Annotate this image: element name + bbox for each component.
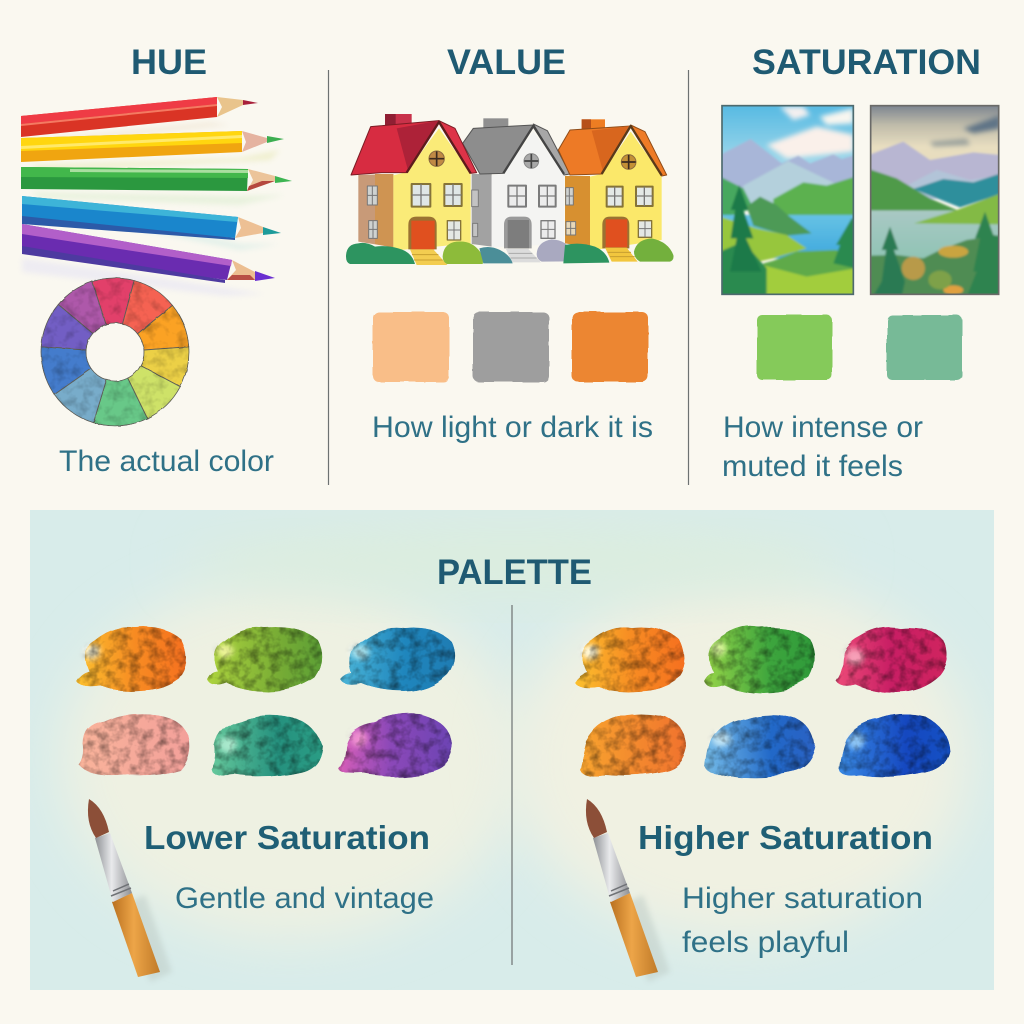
landscape: vivid xyxy=(720,104,855,297)
caption: value: How light or dark it is xyxy=(372,411,653,444)
swatch: muted green xyxy=(887,315,962,380)
caption: hue: The actual color xyxy=(59,445,274,478)
description: higher saturation: Higher saturation xyxy=(682,882,923,915)
orange house xyxy=(558,119,667,262)
color swatches: value xyxy=(373,312,648,382)
heading: value: VALUE xyxy=(447,43,566,82)
illustration: two landscapes xyxy=(720,104,1001,297)
swatch: grey xyxy=(473,312,549,382)
panel: value xyxy=(346,43,674,444)
panel background wash xyxy=(30,510,994,990)
swatch: vivid green xyxy=(757,315,832,380)
red house xyxy=(351,114,477,265)
label: lower saturation: Lower Saturation xyxy=(144,819,430,856)
icon: paintbrush xyxy=(586,799,670,982)
swatch: orange xyxy=(572,312,648,382)
description: lower saturation: Gentle and vintage xyxy=(175,882,434,915)
description: higher saturation: feels playful xyxy=(682,926,849,959)
paint blobs: lower saturation xyxy=(75,627,455,777)
heading: palette: PALETTE xyxy=(437,553,592,592)
sub-panel: higher saturation xyxy=(572,627,949,982)
swatch: peach xyxy=(373,312,449,382)
panel: saturation xyxy=(720,43,1001,483)
icon: paintbrush xyxy=(88,799,172,982)
caption: saturation: How intense or xyxy=(723,411,923,444)
chart: color wheel xyxy=(41,278,189,426)
landscape: muted xyxy=(869,104,1001,297)
heading: hue: HUE xyxy=(131,43,207,82)
description: higher saturation xyxy=(682,882,923,959)
panel: palette xyxy=(30,510,994,990)
caption: saturation xyxy=(722,411,923,483)
color swatches: saturation xyxy=(757,315,962,380)
heading: saturation: SATURATION xyxy=(752,43,981,82)
caption: saturation: muted it feels xyxy=(722,450,903,483)
illustration: row of three houses xyxy=(346,114,674,265)
sub-panel: lower saturation xyxy=(75,627,455,982)
label: higher saturation: Higher Saturation xyxy=(638,819,933,856)
icon: colored pencils xyxy=(21,97,292,296)
panel: hue xyxy=(21,43,292,478)
shrubs xyxy=(346,238,674,264)
grey house behind xyxy=(463,118,570,262)
paint blobs: higher saturation xyxy=(572,627,949,777)
